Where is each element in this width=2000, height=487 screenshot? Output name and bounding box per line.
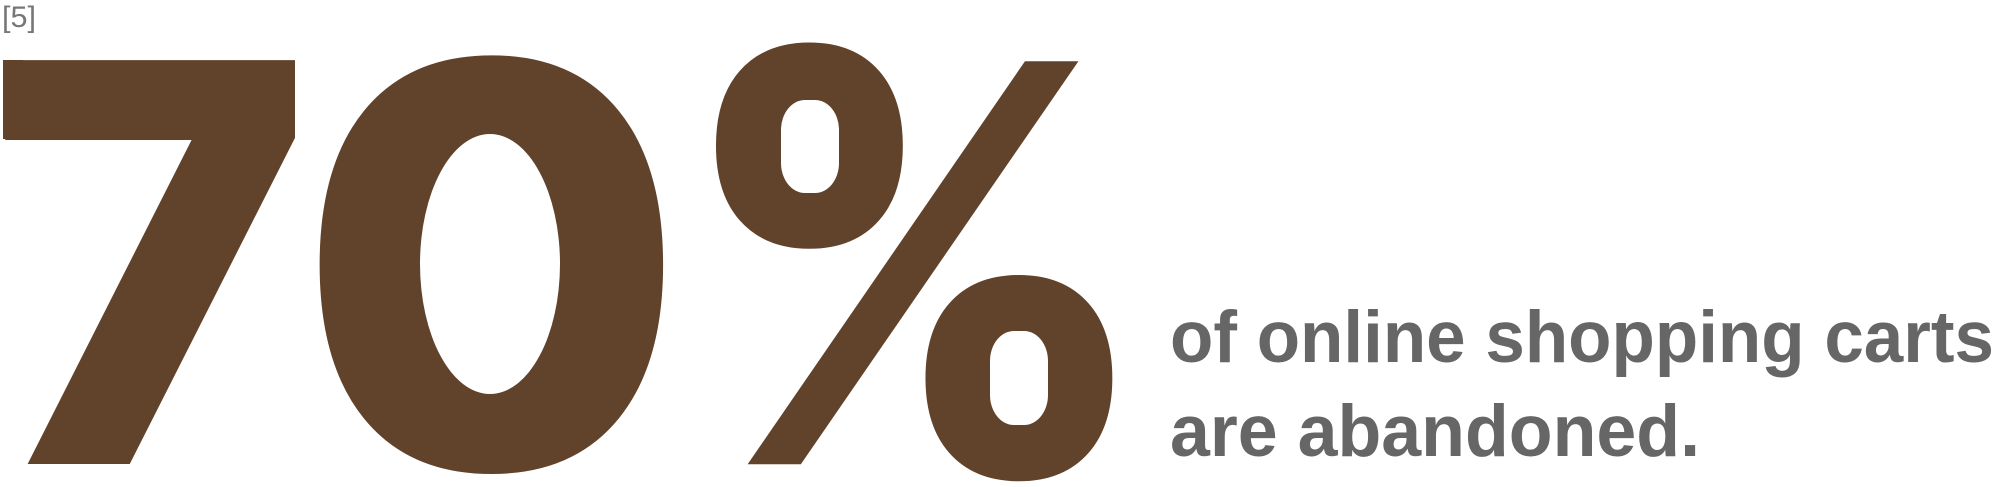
digit 7 — [3, 60, 295, 464]
caption line 1: of online shopping carts — [1170, 297, 1994, 378]
percent sign — [716, 42, 1112, 482]
big number: 70% — [3, 42, 1112, 482]
caption text — [1170, 297, 1994, 472]
citation reference: [5] — [2, 1, 36, 34]
percent top circle: 0 — [719, 14, 900, 287]
caption line 2: are abandoned. — [1170, 391, 1700, 472]
